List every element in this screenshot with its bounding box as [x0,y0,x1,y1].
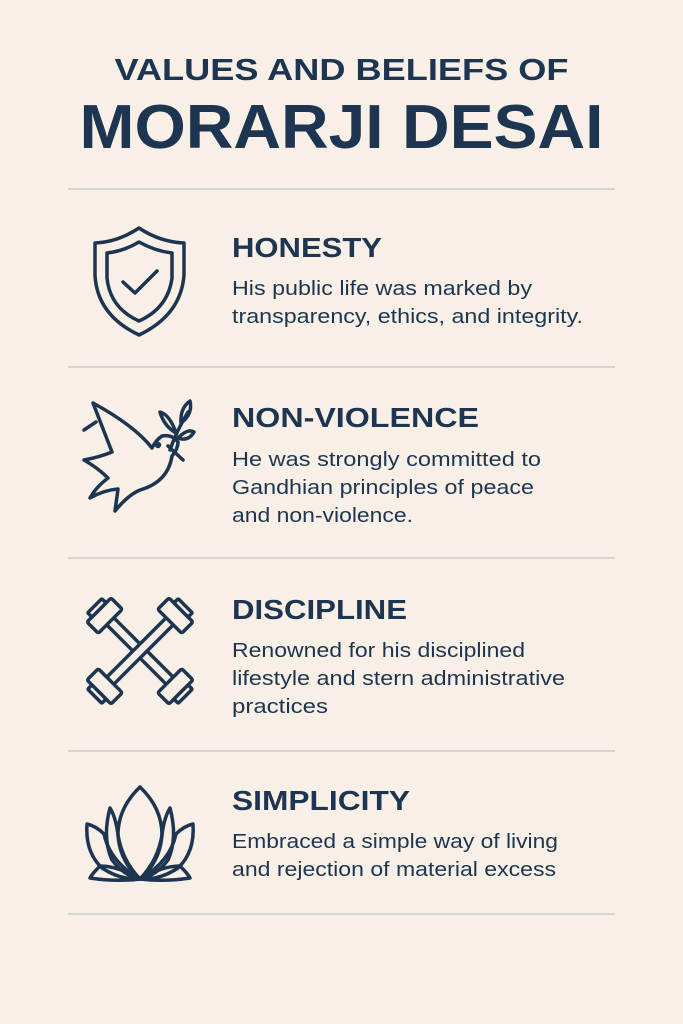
panel: discipline: DISCIPLINE [232,594,407,625]
icon: dove [84,401,194,511]
title: MORARJI DESAI [80,93,604,162]
icon: shield [95,228,184,335]
panel: non-violence: He was strongly committed to [232,449,541,471]
title: VALUES AND BELIEFS OF [114,52,568,87]
icon: crossed dumbbells [83,594,197,708]
panel: honesty: transparency, ethics, and integrity. [232,306,583,328]
panel: discipline: Renowned for his disciplined [232,640,525,662]
panel: honesty: HONESTY [232,232,382,263]
panel: non-violence: Gandhian principles of peace [232,477,534,499]
panel: simplicity: and rejection of material excess [232,859,556,881]
panel: discipline: practices [232,696,328,718]
panel: simplicity: SIMPLICITY [232,785,410,816]
panel: non-violence: and non-violence. [232,505,413,527]
title [80,52,604,162]
panel: discipline [83,594,565,718]
panel: non-violence [84,401,541,527]
panel: discipline: lifestyle and stern administrative [232,668,565,690]
panel: simplicity [87,785,558,881]
panel: simplicity: Embraced a simple way of living [232,831,558,853]
panel: non-violence: NON-VIOLENCE [232,402,479,433]
icon: lotus [87,787,193,880]
panel: honesty [95,228,583,335]
panel: honesty: His public life was marked by [232,278,532,300]
